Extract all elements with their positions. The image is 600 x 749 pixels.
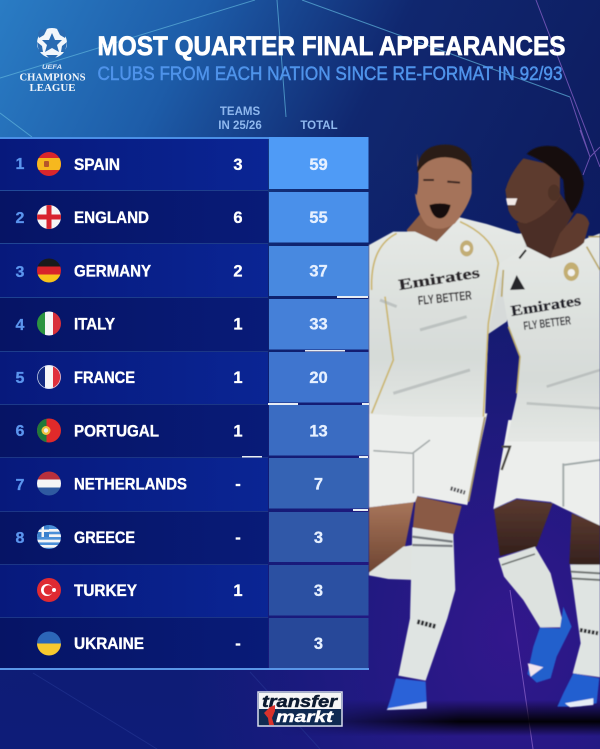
row 8: Greece bbox=[0, 512, 368, 564]
row 7: Netherlands bbox=[0, 458, 368, 511]
row 4: Italy: 1 bbox=[233, 316, 243, 334]
logo: transfermarkt bbox=[258, 692, 342, 726]
flag: Germany bbox=[37, 258, 61, 282]
flag: Portugal bbox=[37, 418, 61, 442]
row 4: Italy bbox=[0, 298, 368, 351]
flag: Netherlands bbox=[37, 472, 61, 496]
row 3: Germany: 2 bbox=[233, 262, 243, 280]
row 2: England: 2 bbox=[16, 210, 25, 227]
row 2: England bbox=[0, 191, 368, 243]
row 6: Portugal: 13 bbox=[309, 422, 328, 440]
players photo bbox=[369, 144, 600, 710]
row 10: Ukraine: - bbox=[235, 635, 241, 653]
row 3: Germany: 3 bbox=[16, 264, 25, 281]
player: left bbox=[369, 144, 527, 710]
row 6: Portugal: 6 bbox=[16, 423, 25, 440]
flag: Italy bbox=[37, 312, 61, 336]
row 7: Netherlands: 7 bbox=[314, 476, 323, 494]
row 3: Germany: 37 bbox=[309, 262, 328, 280]
jersey text: fly better: FLY BETTER bbox=[417, 288, 472, 308]
row 5: France bbox=[0, 352, 368, 404]
row 2: England: 55 bbox=[309, 209, 328, 227]
row 6: Portugal: 1 bbox=[233, 422, 243, 440]
row 4: Italy: 33 bbox=[309, 316, 328, 334]
row 4: Italy: 4 bbox=[16, 317, 25, 334]
row 7: Netherlands: - bbox=[235, 476, 241, 494]
flag: Spain bbox=[37, 152, 61, 176]
logo: transfermarkt: transfer bbox=[262, 693, 339, 711]
champions: CHAMPIONS bbox=[20, 72, 86, 84]
flag: Turkey bbox=[37, 578, 61, 602]
jersey text: Emirates: Emirates bbox=[510, 293, 582, 320]
column header: teams in 25/26 bbox=[218, 106, 262, 132]
row 10: Ukraine bbox=[0, 618, 368, 668]
league: LEAGUE bbox=[30, 82, 76, 94]
column header: teams in 25/26: IN 25/26 bbox=[218, 120, 262, 132]
logo: transfermarkt: markt bbox=[276, 709, 334, 726]
row 6: Portugal: PORTUGAL bbox=[74, 422, 159, 440]
row 9: Turkey: 1 bbox=[233, 582, 243, 600]
row 10: Ukraine: 3 bbox=[314, 635, 323, 653]
row 5: France: 5 bbox=[16, 370, 25, 387]
player: right bbox=[493, 146, 600, 707]
row 6: Portugal bbox=[0, 405, 368, 457]
row 1: Spain: 1 bbox=[16, 156, 25, 173]
row 8: Greece: 3 bbox=[314, 529, 323, 547]
table bbox=[0, 137, 368, 668]
row 8: Greece: - bbox=[235, 529, 241, 547]
flag: France bbox=[37, 365, 61, 389]
row 3: Germany: GERMANY bbox=[74, 262, 151, 280]
flag: England bbox=[37, 205, 61, 229]
row 5: France: 20 bbox=[309, 369, 328, 387]
jersey text: fly better: FLY BETTER bbox=[523, 313, 572, 333]
row 8: Greece: 8 bbox=[16, 530, 25, 547]
row 1: Spain bbox=[0, 137, 368, 190]
row 2: England: 6 bbox=[233, 209, 243, 227]
column header: teams in 25/26: TEAMS bbox=[220, 106, 260, 118]
icon: starball bbox=[37, 28, 67, 58]
row 1: Spain: 59 bbox=[309, 156, 328, 174]
flag: Ukraine bbox=[37, 632, 61, 656]
row 1: Spain: SPAIN bbox=[74, 156, 120, 174]
row 9: Turkey: TURKEY bbox=[74, 582, 137, 600]
row 5: France: FRANCE bbox=[74, 369, 135, 387]
row 1: Spain: 3 bbox=[233, 156, 243, 174]
row 4: Italy: ITALY bbox=[74, 316, 115, 334]
row 8: Greece: GREECE bbox=[74, 529, 135, 547]
icon: red player figure bbox=[264, 705, 275, 725]
row 7: Netherlands: 7 bbox=[16, 477, 25, 494]
row 9: Turkey bbox=[0, 565, 368, 617]
row 9: Turkey: 3 bbox=[314, 582, 323, 600]
row 10: Ukraine: UKRAINE bbox=[74, 635, 144, 653]
jersey text: Emirates: Emirates bbox=[397, 264, 481, 294]
flag: Greece bbox=[37, 525, 61, 549]
uefa mark: UEFA bbox=[42, 64, 62, 71]
row 7: Netherlands: NETHERLANDS bbox=[74, 476, 187, 494]
logo: UEFA Champions League bbox=[20, 28, 86, 94]
row 5: France: 1 bbox=[233, 369, 243, 387]
row 2: England: ENGLAND bbox=[74, 209, 149, 227]
column header: total: TOTAL bbox=[300, 120, 338, 132]
row 3: Germany bbox=[0, 244, 368, 297]
